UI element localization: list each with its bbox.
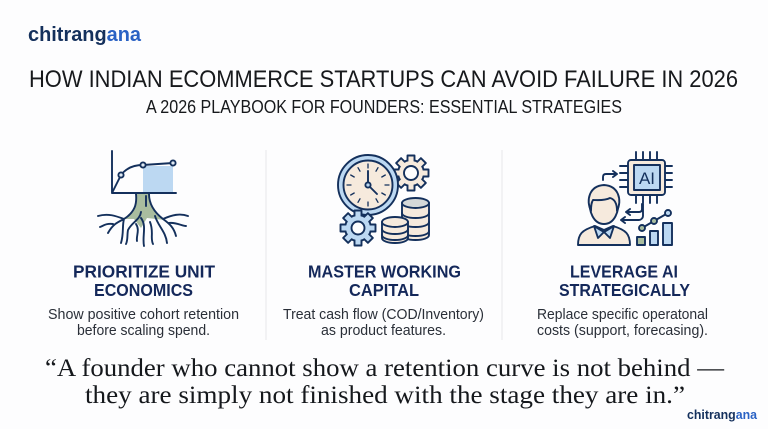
arrows <box>603 171 643 223</box>
icon: top right gear <box>394 156 428 190</box>
text: unit economics description: before scaling spend. <box>77 322 210 339</box>
quote: “A founder who cannot show a retention curve is not behind — <box>45 353 725 382</box>
quote: they are simply not finished with the stage they are in.” <box>85 380 685 409</box>
icon: person with AI chip and chart <box>578 152 672 245</box>
icon: clock <box>338 155 398 215</box>
text: working capital description: Treat cash flow (COD/Inventory) <box>283 306 484 323</box>
heading: master working capital: CAPITAL <box>349 280 419 300</box>
subtitle: A 2026 PLAYBOOK FOR FOUNDERS: ESSENTIAL STRATEGIES <box>146 97 622 117</box>
icon: AI chip: AI <box>639 169 655 188</box>
icon: retention curve with roots <box>98 151 188 246</box>
icon: coin stacks <box>382 198 429 243</box>
heading: leverage ai strategically: LEVERAGE AI <box>570 262 678 282</box>
text: working capital description: as product features. <box>321 322 446 339</box>
panel: leverage ai <box>537 152 708 339</box>
heading: prioritize unit economics: PRIORITIZE UNIT <box>73 262 215 282</box>
icon: person <box>578 185 630 245</box>
icon: bottom left gear <box>340 210 376 246</box>
text: unit economics description: Show positive cohort retention <box>48 306 239 323</box>
heading: prioritize unit economics: ECONOMICS <box>94 280 193 300</box>
icon: clock, gears and coins <box>338 155 429 246</box>
text: leverage ai description: Replace specific operatonal <box>537 306 708 323</box>
logo: bottom right: chitrangana <box>687 407 758 422</box>
text: leverage ai description: costs (support, forecasing). <box>537 322 708 339</box>
heading: master working capital: MASTER WORKING <box>308 262 461 282</box>
panel: unit economics <box>48 151 239 339</box>
logo: top left: chitrangana <box>28 24 142 46</box>
heading: leverage ai strategically: STRATEGICALLY <box>559 280 690 300</box>
icon: bar chart with trend <box>637 210 672 245</box>
panel: working capital <box>283 155 484 339</box>
